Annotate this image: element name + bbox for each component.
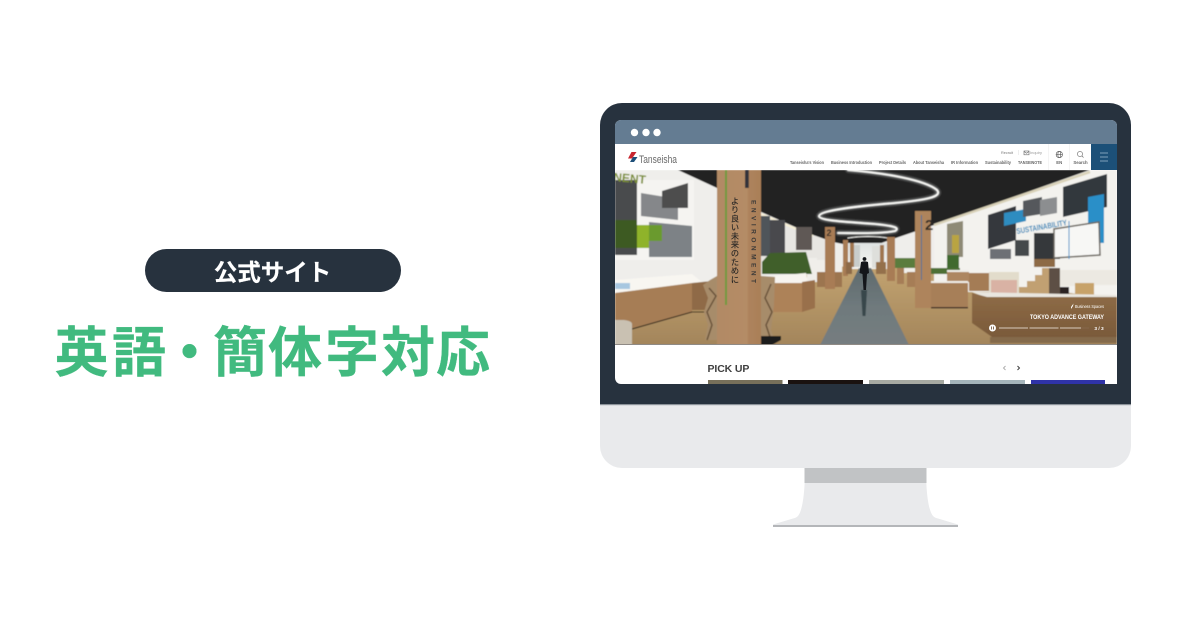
left counter <box>615 274 712 345</box>
site header navigation: IR Information <box>951 160 978 165</box>
site header navigation: Sustainability <box>985 160 1012 165</box>
numbered pillar: 2 <box>925 217 933 234</box>
sign text on pillar: よ <box>731 195 739 207</box>
site header navigation: Tanseisha's Vision <box>790 160 824 165</box>
slide caption: Business Spaces <box>1075 304 1104 310</box>
menu button <box>1091 144 1117 170</box>
visitor silhouette <box>860 257 869 290</box>
sign text on pillar: り <box>731 204 739 216</box>
slide controls: 3 / 3 <box>1094 326 1104 332</box>
centre aisle <box>820 268 909 345</box>
sign text on pillar: の <box>731 247 739 259</box>
slide controls <box>989 324 1104 332</box>
badge: official site: 公式サイト <box>214 254 331 288</box>
hero photo: exhibition hall <box>613 170 1117 345</box>
site header navigation: EN <box>1056 160 1062 165</box>
slide caption: TOKYO ADVANCE GATEWAY <box>1030 314 1105 321</box>
site header navigation: Business Introduction <box>831 160 872 165</box>
sign text on pillar: い <box>731 221 739 233</box>
sign text on pillar <box>731 195 756 285</box>
site header navigation: Recruit <box>1001 150 1014 155</box>
sign text on pillar: 良 <box>731 212 739 224</box>
logo: Tanseisha: Tanseisha <box>639 154 678 166</box>
icon: globe <box>1056 151 1063 158</box>
monitor illustration <box>600 103 1131 527</box>
sign text on pillar: め <box>731 265 739 277</box>
sign text on pillar: 来 <box>731 238 739 250</box>
carousel arrows <box>1004 366 1006 370</box>
site header navigation: Inquiry <box>1030 150 1042 155</box>
mid counters <box>931 255 989 308</box>
sign text on pillar: 未 <box>731 230 739 242</box>
logo: Tanseisha <box>628 152 677 163</box>
floor <box>615 262 1117 345</box>
sign text on pillar: に <box>731 273 739 285</box>
ceiling <box>678 170 1090 247</box>
site header navigation <box>615 144 1117 170</box>
site header navigation: Project Details <box>879 160 907 165</box>
thumbnails <box>708 380 1105 384</box>
monitor bezel <box>600 103 1131 468</box>
browser screen <box>613 120 1117 385</box>
visitor reflection <box>861 290 867 316</box>
hanging ring lights <box>819 170 938 238</box>
badge: official site <box>145 249 401 292</box>
slide caption <box>1030 304 1104 319</box>
browser title bar <box>615 120 1117 144</box>
far end of hall <box>848 243 890 269</box>
site header navigation: TANSEINOTE <box>1018 160 1042 165</box>
sign text on pillar: ENVIRONMENT <box>750 200 756 283</box>
right display counter <box>972 259 1117 343</box>
left wall gallery <box>613 170 694 260</box>
numbered pillar <box>915 211 933 308</box>
pick up section <box>708 365 1105 384</box>
right gallery wall: SUSTAINABILITY <box>1016 218 1068 236</box>
icon: mail <box>1024 151 1029 155</box>
pick up section: PICK UP <box>708 363 750 375</box>
right gallery wall <box>934 170 1117 292</box>
site header navigation: Search <box>1073 160 1088 165</box>
central pillar with vertical sign <box>703 170 781 345</box>
right hall pillars and counters <box>876 237 915 287</box>
site header navigation: About Tanseisha <box>913 160 945 165</box>
display plinths left <box>762 227 854 312</box>
display plinths left: 2 <box>826 228 832 238</box>
sign text on pillar: た <box>731 256 739 268</box>
left wall gallery: NENT <box>613 170 647 187</box>
left wall images behind pillar <box>761 216 812 257</box>
icon: search <box>1077 151 1084 158</box>
title: 英語・簡体字対応 <box>54 308 490 388</box>
monitor stand <box>773 468 958 527</box>
